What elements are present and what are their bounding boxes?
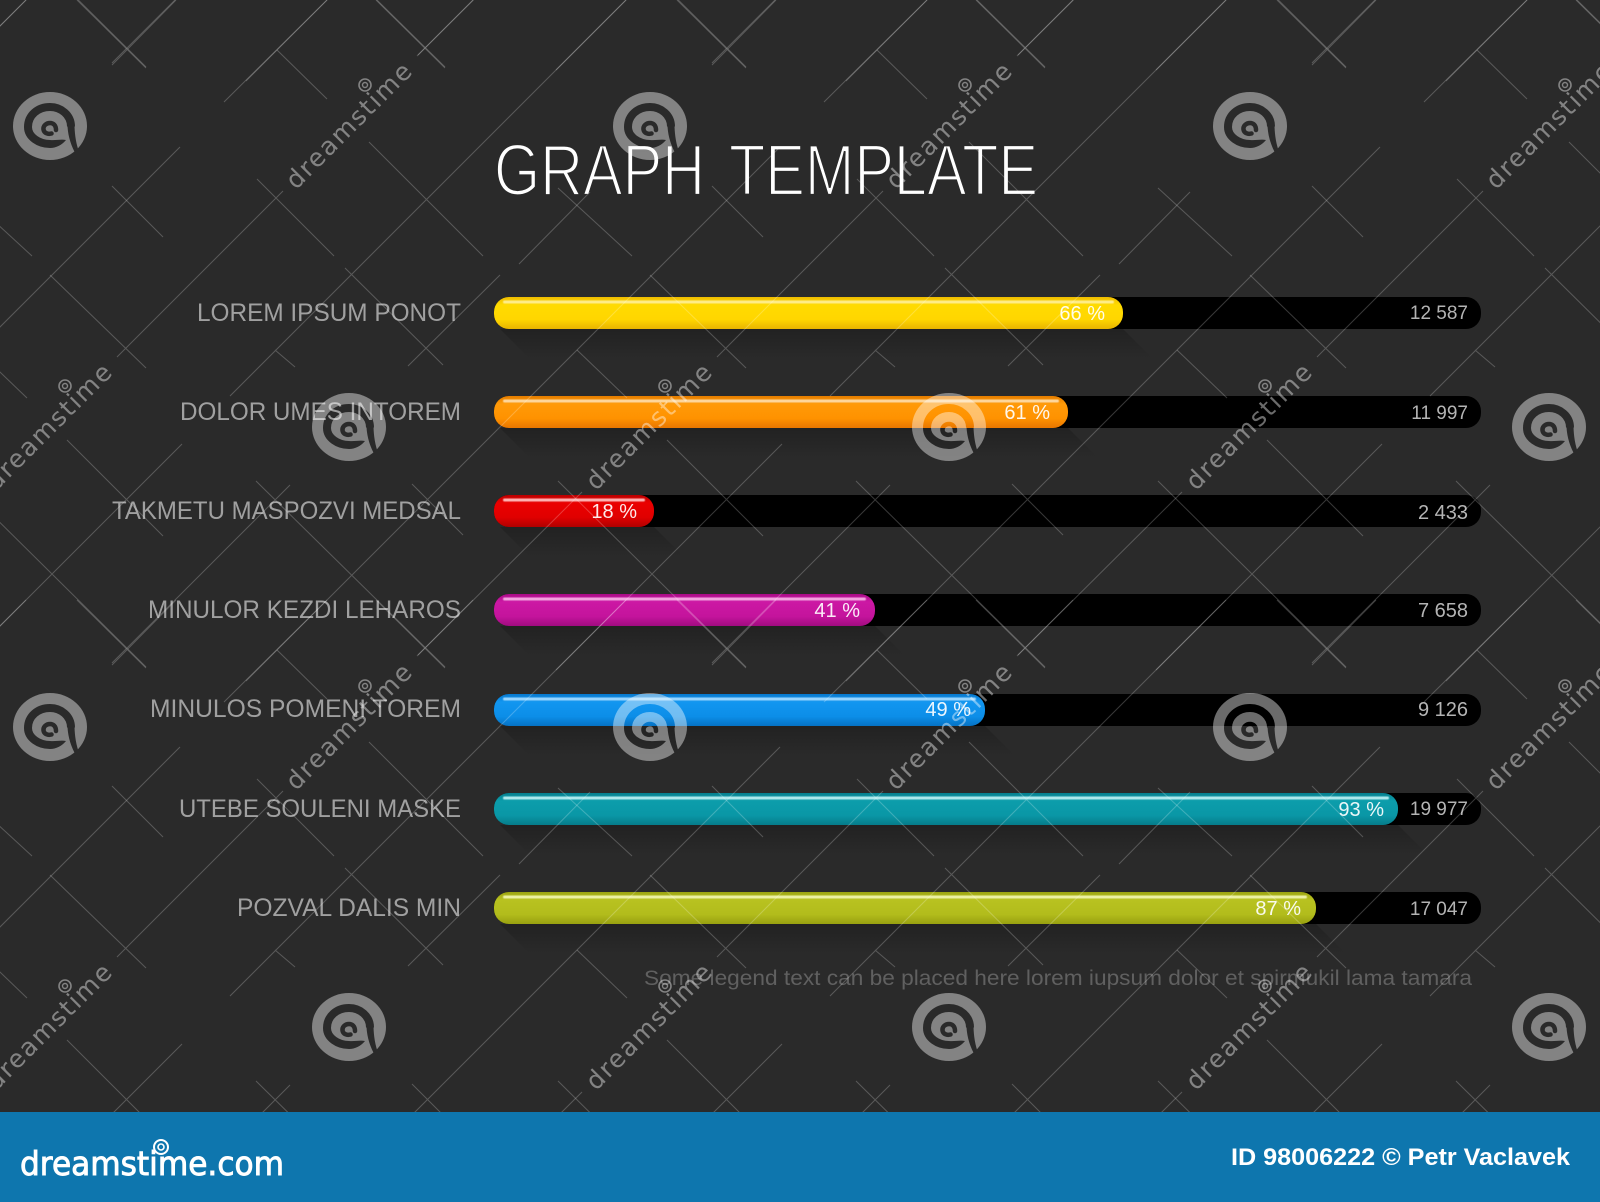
bar row: Lorem Ipsum Ponot: 66 %: [1059, 303, 1105, 325]
footer banner: [0, 1112, 1600, 1202]
watermark wordmarks: dreamstime: [880, 658, 1018, 796]
watermark wordmarks: dreamstime: [580, 358, 718, 496]
bar row: Takmetu Maspozvi Medsal: 2 433: [1418, 502, 1468, 524]
bar row: Minulor Kezdi Leharos: MINULOR KEZDI LEHAROS: [148, 596, 461, 624]
watermark wordmarks: dreamstime: [280, 658, 418, 796]
title: GRAPH: [494, 131, 705, 211]
bar row: Lorem Ipsum Ponot: [197, 297, 1481, 359]
bar row: Dolor Umes Intorem: [180, 396, 1481, 458]
bar row: Minulos Pomeni Torem: 9 126: [1418, 699, 1468, 721]
footer logo: dreamstime.com: [20, 1144, 284, 1183]
bar row: Pozval Dalis Min: [237, 892, 1481, 954]
footer credit: ID 98006222 © Petr Vaclavek: [1231, 1144, 1571, 1171]
title: TEMPLATE: [729, 131, 1038, 211]
bar row: Minulor Kezdi Leharos: [148, 594, 1481, 656]
bar row: Minulos Pomeni Torem: 49 %: [925, 699, 971, 721]
bar row: Dolor Umes Intorem: DOLOR UMES INTOREM: [180, 398, 461, 426]
bar row: Dolor Umes Intorem: 11 997: [1411, 403, 1468, 424]
bar row: Minulos Pomeni Torem: MINULOS POMENI TOREM: [150, 695, 461, 723]
bar row: Minulor Kezdi Leharos: 41 %: [814, 600, 860, 622]
bar row: Lorem Ipsum Ponot: 12 587: [1410, 303, 1468, 324]
bar row: Minulor Kezdi Leharos: 7 658: [1418, 600, 1468, 622]
bar row: Utebe Souleni Maske: 19 977: [1410, 799, 1468, 820]
bar row: Pozval Dalis Min: 87 %: [1255, 898, 1301, 920]
bar row: Lorem Ipsum Ponot: LOREM IPSUM PONOT: [197, 299, 461, 327]
bar row: Utebe Souleni Maske: 93 %: [1338, 799, 1384, 821]
title: [494, 131, 1038, 211]
bar row: Dolor Umes Intorem: 61 %: [1004, 402, 1050, 424]
bar row: Pozval Dalis Min: POZVAL DALIS MIN: [237, 894, 461, 922]
bar row: Utebe Souleni Maske: UTEBE SOULENI MASKE: [179, 795, 461, 823]
legend text: Some legend text can be placed here lorem iupsum dolor et spirmukil lama tamara: [644, 967, 1472, 990]
bar row: Pozval Dalis Min: 17 047: [1410, 899, 1468, 920]
bar row: Utebe Souleni Maske: [179, 793, 1481, 855]
watermark wordmarks: dreamstime: [1180, 358, 1318, 496]
watermark wordmarks: dreamstime: [1180, 958, 1318, 1096]
bar row: Minulos Pomeni Torem: [150, 694, 1481, 756]
watermark wordmarks: dreamstime: [880, 57, 1018, 195]
bar row: Takmetu Maspozvi Medsal: TAKMETU MASPOZVI MEDSAL: [112, 497, 461, 525]
watermark wordmarks: dreamstime: [280, 57, 418, 195]
bar row: Takmetu Maspozvi Medsal: 18 %: [591, 501, 637, 523]
bar row: Takmetu Maspozvi Medsal: [112, 495, 1481, 557]
watermark wordmarks: dreamstime: [580, 958, 718, 1096]
